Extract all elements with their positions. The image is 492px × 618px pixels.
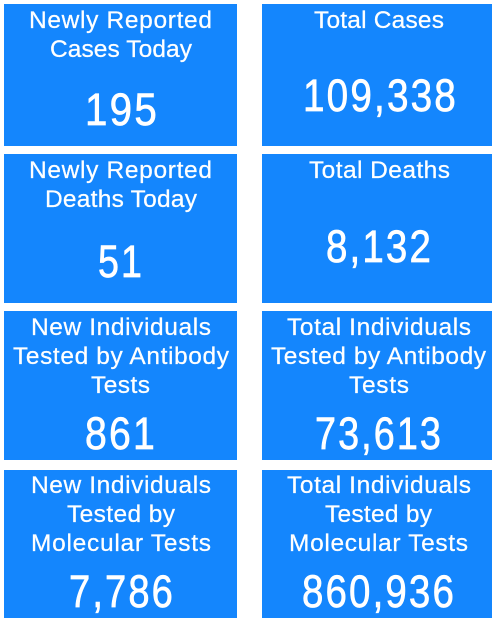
number: 73,613: 73,613 xyxy=(315,408,443,459)
panel: newly reported deaths today xyxy=(4,154,237,303)
heading: new individuals tested by antibody tests: Tested by Antibody xyxy=(13,343,230,370)
panel: total individuals tested by antibody tests xyxy=(262,311,492,460)
number: 8,132: 8,132 xyxy=(326,221,433,272)
number: 7,786: 7,786 xyxy=(69,566,175,617)
heading: new individuals tested by antibody tests: New Individuals xyxy=(31,314,211,341)
heading: total individuals tested by antibody tests: Tested by Antibody xyxy=(271,343,487,370)
panel: total individuals tested by molecular tests xyxy=(262,470,492,618)
heading: total individuals tested by molecular tests: Molecular Tests xyxy=(289,530,468,557)
panel: new individuals tested by molecular tests xyxy=(4,470,237,618)
number: 861: 861 xyxy=(85,408,157,459)
heading: new individuals tested by antibody tests xyxy=(13,314,230,399)
heading: newly reported cases today: Newly Reported xyxy=(29,7,212,34)
number: 51: 51 xyxy=(98,236,144,287)
heading: total deaths: Total Deaths xyxy=(309,157,450,184)
panel: total cases xyxy=(262,4,492,146)
heading: new individuals tested by molecular tests: Molecular Tests xyxy=(31,530,211,557)
heading: new individuals tested by molecular tests: New Individuals xyxy=(31,472,211,499)
heading: newly reported cases today xyxy=(29,7,212,63)
heading: total individuals tested by molecular tests: Total Individuals xyxy=(287,472,471,499)
number: 195: 195 xyxy=(85,84,159,135)
panel: new individuals tested by antibody tests xyxy=(4,311,237,460)
panel: newly reported cases today xyxy=(4,4,237,146)
heading: newly reported deaths today: Newly Reported xyxy=(29,157,212,184)
heading: total individuals tested by molecular tests xyxy=(287,472,471,557)
heading: newly reported deaths today xyxy=(29,157,212,213)
number: 860,936: 860,936 xyxy=(302,566,456,617)
number: 109,338: 109,338 xyxy=(303,70,458,121)
panel: total deaths xyxy=(262,154,492,303)
heading: total cases: Total Cases xyxy=(314,7,444,34)
heading: new individuals tested by molecular tests: Tested by xyxy=(67,501,176,528)
heading: newly reported deaths today: Deaths Today xyxy=(45,186,198,213)
heading: total individuals tested by antibody tests xyxy=(271,314,487,399)
heading: new individuals tested by antibody tests: Tests xyxy=(91,372,150,399)
heading: total individuals tested by antibody tests: Total Individuals xyxy=(287,314,471,341)
heading: newly reported cases today: Cases Today xyxy=(50,36,193,63)
heading: total individuals tested by molecular tests: Tested by xyxy=(325,501,433,528)
heading: new individuals tested by molecular tests xyxy=(31,472,211,557)
heading: total individuals tested by antibody tests: Tests xyxy=(349,372,409,399)
